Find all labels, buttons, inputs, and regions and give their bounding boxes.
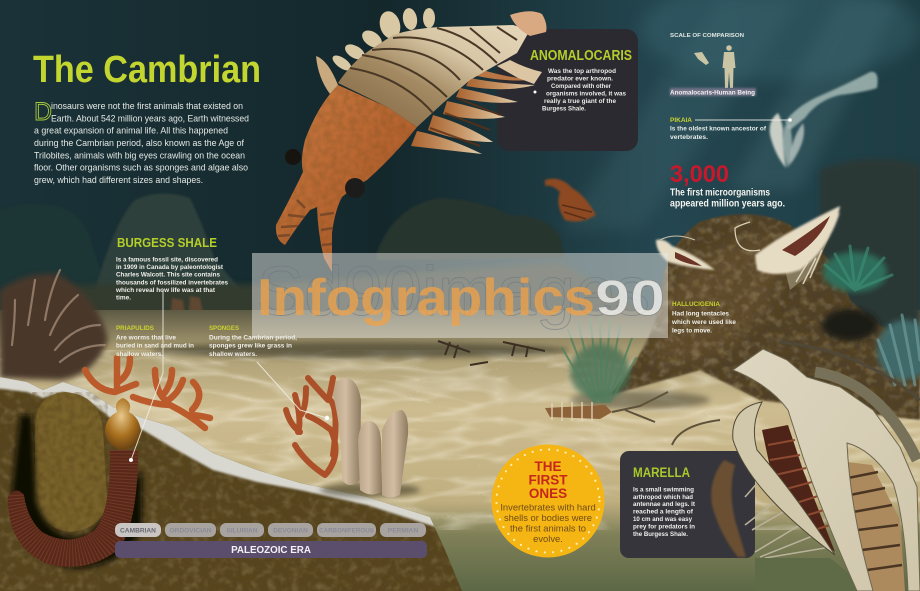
sand sea floor <box>0 310 920 591</box>
body text: Compared with other <box>551 83 611 90</box>
right rock mound <box>610 159 920 420</box>
top lobes <box>316 7 435 94</box>
drop cap: D <box>34 98 52 126</box>
callout: Pikaia: Is the oldest known ancestor of <box>670 126 767 132</box>
period: Ordovician <box>165 523 216 537</box>
callout: Priapulids <box>116 325 194 358</box>
period: Cambrian: CAMBRIAN <box>120 528 156 534</box>
period: Devonian <box>268 523 313 537</box>
callout: Burgess Shale <box>115 236 228 302</box>
callout: Priapulids: PRIAPULIDS <box>116 325 155 332</box>
callout: intro heading and text <box>33 49 261 185</box>
body text: Is a small swimming <box>633 486 694 494</box>
body <box>276 85 417 272</box>
body text: really a true giant of the <box>544 98 616 105</box>
heading: MARELLA <box>633 465 690 480</box>
period: Carboniferous <box>317 523 376 537</box>
panel: Marella <box>620 451 755 558</box>
callout: Priapulids: Are worms that live <box>116 334 176 342</box>
illustration: pikaia <box>770 72 878 168</box>
intro paragraph <box>34 100 249 185</box>
body text <box>115 256 228 302</box>
heading: THE <box>534 459 562 474</box>
callout: Sponges <box>209 325 297 358</box>
sponges: tube sponges <box>320 378 420 498</box>
illustration: large foreground creature body <box>711 349 920 591</box>
leader lines <box>131 120 790 460</box>
watermark: Infographics <box>257 269 595 327</box>
era bar: PALEOZOIC ERA <box>231 545 311 556</box>
body text <box>633 486 696 538</box>
cream shell <box>733 349 920 591</box>
body text: which reveal how life was at that <box>115 287 216 294</box>
callout: Sponges: shallow waters. <box>209 351 257 358</box>
soil mound with burrow <box>0 370 470 591</box>
callout: Pikaia <box>670 117 767 141</box>
callout: Pikaia: vertebrates. <box>670 134 708 141</box>
period: Carboniferous: CARBONIFEROUS <box>319 528 374 534</box>
body mottling <box>276 86 414 253</box>
worm: priapulid <box>8 398 141 567</box>
period: Permian <box>380 523 426 537</box>
body text: Burgess Shale. <box>542 106 586 112</box>
watermark: Sd90images <box>257 252 650 330</box>
body text: shells or bodies were <box>504 512 592 523</box>
intro paragraph: inosaurs were not the first animals that existed on <box>51 100 243 111</box>
body text: evolve. <box>533 533 563 544</box>
head <box>510 11 546 36</box>
heading: ONES <box>529 486 567 501</box>
callout: Sponges: sponges grew like grass in <box>209 342 292 350</box>
heading <box>528 459 568 501</box>
comb legs <box>745 480 825 558</box>
coral: red branching sponges <box>85 358 336 475</box>
callout: Priapulids: buried in sand and mud in <box>116 342 194 350</box>
panel: Anomalocaris <box>497 29 638 151</box>
heading: FIRST <box>528 472 568 488</box>
body text: 10 cm and was easy <box>633 516 692 523</box>
callout: Hallucigenia: legs to move. <box>672 328 712 334</box>
label highlight <box>670 88 756 96</box>
body text: Was the top arthropod <box>548 68 616 75</box>
illustration: large creature back rim <box>780 342 920 460</box>
plant: green seagrass <box>562 316 636 402</box>
scale of comparison <box>670 33 756 96</box>
intro paragraph: a great expansion of animal life. All this happened <box>34 124 228 136</box>
period: Permian: PERMIAN <box>388 528 418 534</box>
rear tubular arm <box>733 402 835 555</box>
body text: organisms involved, it was <box>546 90 626 98</box>
icon: anomalocaris silhouette <box>694 52 709 65</box>
body text: prey for predators in <box>633 524 695 530</box>
illustration: hallucigenia creatures <box>656 206 840 290</box>
plant: brown feather weed <box>0 270 108 380</box>
body text: in 1909 in Canada by paleontologist <box>116 264 224 271</box>
body text: time. <box>116 294 131 302</box>
callout: 3,000 <box>670 161 785 210</box>
title: The Cambrian <box>33 49 261 91</box>
callout: Sponges: SPONGES <box>209 325 240 332</box>
body text: antennae and legs. It <box>633 501 696 508</box>
period: Silurian: SILURIAN <box>226 528 258 534</box>
body text: the Burgess Shale. <box>633 531 688 538</box>
era bar <box>115 541 427 558</box>
small crustaceans on the sand <box>438 341 720 445</box>
intro paragraph: Earth. About 542 million years ago, Earth witnessed <box>51 112 249 124</box>
timeline: Paleozoic era <box>115 523 427 558</box>
callout: Hallucigenia: HALLUCIGENIA <box>672 301 720 308</box>
period: Silurian <box>220 523 264 537</box>
body text: Charles Walcott. This site contains <box>116 272 220 278</box>
callout: 3,000: 3,000 <box>670 161 729 188</box>
intro paragraph: grew, which had different sizes and shapes. <box>34 174 203 185</box>
callout: Priapulids: shallow waters. <box>116 351 163 358</box>
plant: teal anemone <box>877 315 920 385</box>
period: Cambrian <box>115 523 161 537</box>
ribs <box>411 60 542 154</box>
icon: human silhouette <box>722 45 736 88</box>
body text <box>500 502 596 544</box>
body text: the first animals to <box>510 522 586 534</box>
background rocks: left and centre <box>0 193 660 360</box>
callout dots <box>129 90 792 462</box>
body text: reached a length of <box>633 508 694 516</box>
plant: green anemone <box>823 246 892 292</box>
heading: ANOMALOCARIS <box>530 48 632 64</box>
intro paragraph: floor. Other organisms such as sponges and algae also <box>34 162 248 172</box>
body text <box>542 68 626 112</box>
label: Anomalocaris-Human Being <box>670 90 755 96</box>
segmented body <box>847 462 905 591</box>
illustration: anomalocaris <box>270 7 546 275</box>
carapace plates <box>338 25 530 127</box>
period: Ordovician: ORDOVICIAN <box>169 528 212 534</box>
body text: Is a famous fossil site, discovered <box>116 256 218 264</box>
green sea floor under creature <box>755 558 870 591</box>
callout: 3,000: The first microorganisms <box>670 188 770 198</box>
body text: arthropod which had <box>633 494 693 501</box>
period: Devonian: DEVONIAN <box>273 528 308 534</box>
eyes <box>285 149 301 165</box>
callout: Hallucigenia <box>671 301 736 334</box>
intro paragraph: during the Cambrian period, also known as the Age of <box>34 137 244 148</box>
body text: Invertebrates with hard <box>500 502 596 512</box>
callout: Hallucigenia: which were used like <box>671 319 736 326</box>
callout: 3,000: appeared million years ago. <box>670 198 785 210</box>
callout: Sponges: During the Cambrian period, <box>209 334 297 342</box>
gills <box>762 425 835 552</box>
callout: Hallucigenia: Had long tentacles <box>672 310 729 318</box>
intro paragraph: Trilobites, animals with big eyes crawling on the ocean <box>34 150 245 160</box>
body text: thousands of fossilized invertebrates <box>116 280 228 286</box>
heading: BURGESS SHALE <box>117 236 217 250</box>
heading: SCALE OF COMPARISON <box>670 33 744 39</box>
icon: small orange creature <box>545 179 596 222</box>
body text: predator ever known. <box>547 76 613 82</box>
info circle: The First Ones <box>492 444 604 558</box>
watermark: 90 <box>595 270 665 326</box>
callout: Pikaia: PIKAIA <box>670 117 692 124</box>
